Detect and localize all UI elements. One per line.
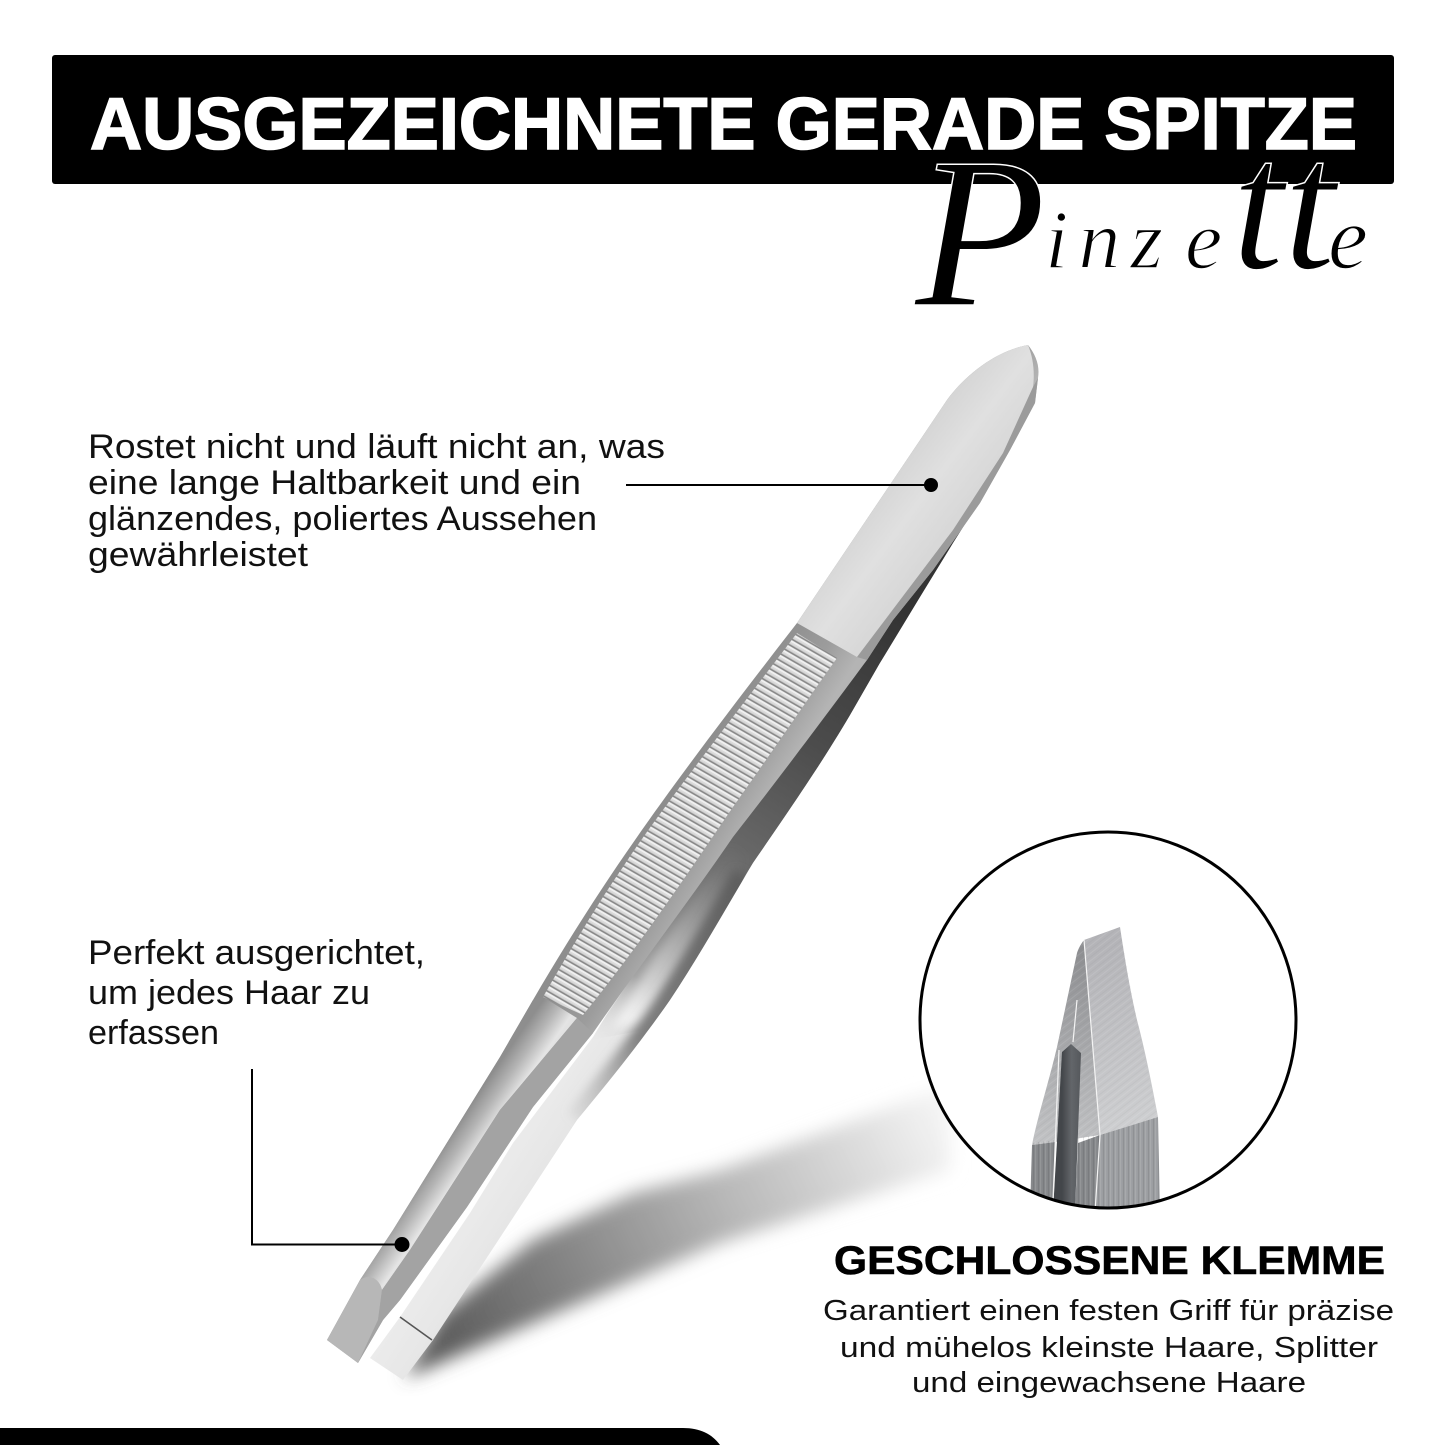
callout text: glänzendes, poliertes Aussehen <box>88 500 597 538</box>
tweezers illustration <box>327 345 1039 1380</box>
callout text: Rostet nicht und läuft nicht an, was <box>88 428 665 466</box>
script subtitle: e <box>1185 194 1222 287</box>
callout text <box>88 428 665 574</box>
callout text: erfassen <box>88 1014 219 1052</box>
closed clamp description: Garantiert einen festen Griff für präzise <box>823 1295 1394 1327</box>
paddle face <box>797 345 1034 657</box>
script subtitle: inz <box>1045 194 1173 287</box>
bottom black bar <box>0 1428 720 1445</box>
paddle rim highlight <box>857 378 1038 660</box>
closed clamp description <box>823 1295 1394 1399</box>
back blade tip line <box>400 1317 432 1340</box>
script subtitle: P <box>913 113 1046 352</box>
front blade tip <box>327 1277 382 1363</box>
callout text <box>88 934 425 1052</box>
title banner <box>52 55 1394 184</box>
leader line <box>252 1069 410 1252</box>
callout text: Perfekt ausgerichtet, <box>88 934 425 972</box>
callout: alignment <box>88 934 425 1252</box>
tip close-up <box>1030 927 1160 1212</box>
closed clamp description: und mühelos kleinste Haare, Splitter <box>840 1332 1378 1364</box>
detail circle: closed clamp <box>920 832 1296 1212</box>
callout: rust free <box>88 428 938 574</box>
serrated grip <box>543 633 837 1015</box>
leader line <box>626 478 938 492</box>
lower front strip <box>358 1018 593 1363</box>
back blade <box>370 490 990 1380</box>
script subtitle: e <box>1328 189 1368 288</box>
callout text: eine lange Haltbarkeit und ein <box>88 464 581 502</box>
title text: AUSGEZEICHNETE GERADE SPITZE <box>90 84 1357 165</box>
callout text: gewährleistet <box>88 536 309 574</box>
callout text: um jedes Haar zu <box>88 974 370 1012</box>
script subtitle: tt <box>1232 103 1340 309</box>
closed clamp heading: GESCHLOSSENE KLEMME <box>834 1239 1385 1283</box>
tweezers shadow <box>405 1085 950 1378</box>
front blade body <box>327 345 1039 1363</box>
lower front face <box>360 997 577 1290</box>
closed clamp description: und eingewachsene Haare <box>912 1367 1306 1399</box>
